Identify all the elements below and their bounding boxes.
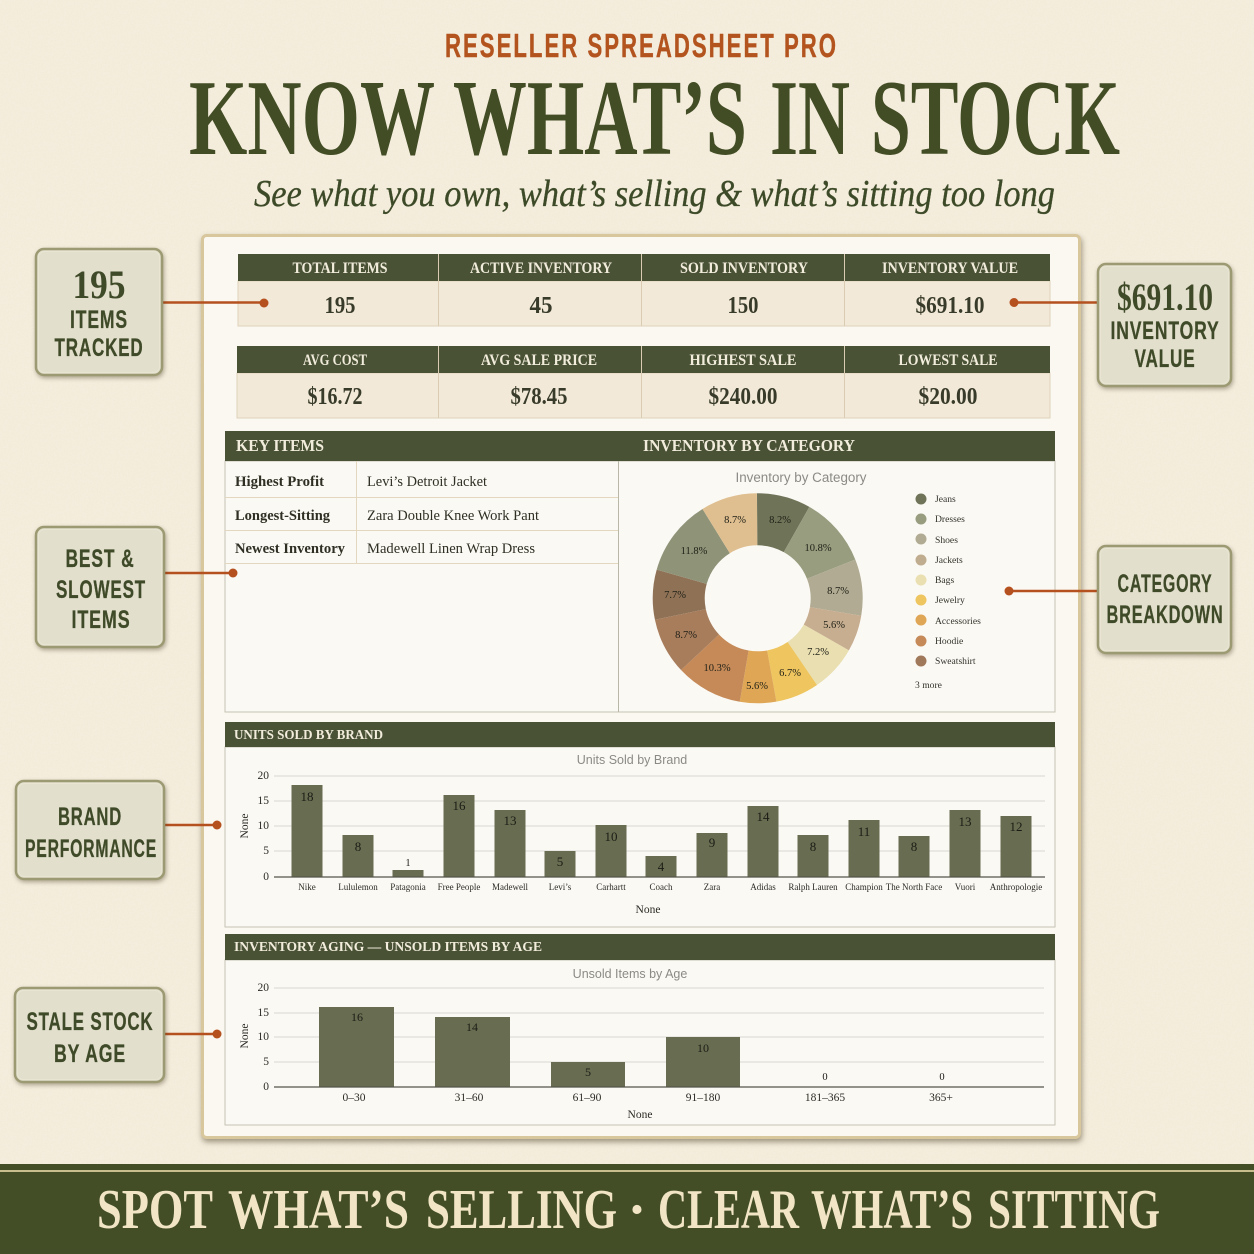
panel: spreadsheet sheet: [202, 236, 1080, 1138]
donut legend: Jeans: [935, 494, 956, 505]
donut chart: inventory by category: 8.7%: [724, 515, 746, 526]
KPI row: averages: [237, 346, 1050, 418]
KPI row: averages: LOWEST SALE: [898, 352, 998, 369]
donut legend: Shoes: [935, 535, 958, 546]
bar chart: unsold items by age: 10: [258, 1031, 269, 1043]
bar chart: units sold by brand: Nike: [298, 882, 316, 892]
key items table: [225, 461, 618, 564]
donut chart: inventory by category: 11.8%: [681, 546, 708, 557]
panel: key items and category frame: INVENTORY BY CATEGORY: [643, 436, 855, 455]
KPI row: averages: $240.00: [708, 384, 778, 410]
KPI row: averages: AVG COST: [303, 352, 368, 369]
bar chart: units sold by brand: 13: [958, 814, 972, 829]
bar chart: units sold by brand: Carhartt: [596, 882, 626, 892]
key items table: Highest Profit: [235, 474, 324, 490]
callout: best and slowest items: ITEMS: [72, 606, 130, 634]
key items table: Levi’s Detroit Jacket: [367, 474, 488, 490]
donut chart: inventory by category: 5.6%: [746, 681, 768, 692]
KPI row: averages: HIGHEST SALE: [690, 352, 796, 369]
bar chart: units sold by brand: 13: [504, 813, 516, 828]
bar chart: units sold by brand: 0: [263, 871, 269, 883]
bar chart: unsold items by age: [225, 934, 1055, 1125]
footer banner: ·: [628, 1179, 646, 1241]
bar chart: units sold by brand: Madewell: [492, 882, 528, 892]
callout: inventory value: $691.10: [1117, 276, 1213, 319]
bar chart: unsold items by age: 10: [697, 1041, 709, 1055]
KPI row: totals: ACTIVE INVENTORY: [470, 260, 612, 277]
bar chart: unsold items by age: 0–30: [342, 1092, 366, 1104]
donut legend: Sweatshirt: [935, 656, 976, 667]
bar chart: units sold by brand: Ralph Lauren: [788, 882, 838, 892]
title: KNOW: [189, 59, 435, 178]
bar chart: units sold by brand: None: [239, 814, 251, 838]
KPI row: totals: 195: [324, 293, 356, 319]
bar chart: units sold by brand: 8: [911, 839, 917, 854]
bar chart: unsold items by age: 61–90: [573, 1092, 602, 1104]
footer banner: SPOT: [97, 1179, 213, 1241]
eyebrow heading: RESELLER SPREADSHEET PRO: [445, 27, 838, 64]
bar chart: units sold by brand: None: [636, 904, 660, 916]
bar chart: unsold items by age: 0: [822, 1072, 828, 1083]
bar chart: unsold items by age: 5: [263, 1056, 269, 1068]
bar chart: units sold by brand: Anthropologie: [990, 882, 1042, 892]
KPI row: totals: TOTAL ITEMS: [292, 260, 388, 277]
donut legend: Bags: [935, 575, 954, 586]
bar chart: unsold items by age: 14: [466, 1020, 478, 1034]
bar chart: units sold by brand: Champion: [845, 882, 883, 892]
KPI row: totals: 150: [728, 293, 758, 319]
donut chart: inventory by category: [664, 470, 867, 692]
KPI row: totals: SOLD INVENTORY: [680, 260, 808, 277]
bar chart: units sold by brand: 8: [810, 839, 816, 854]
bar chart: unsold items by age: INVENTORY AGING — UNSOLD ITEMS BY AGE: [234, 940, 542, 955]
footer banner: SELLING: [426, 1179, 617, 1241]
key items table: Madewell Linen Wrap Dress: [367, 541, 535, 557]
bar chart: units sold by brand: 16: [452, 798, 466, 813]
KPI row: totals: 45: [530, 293, 552, 319]
bar chart: unsold items by age: 365+: [929, 1092, 953, 1104]
donut chart: inventory by category: 10.8%: [804, 543, 832, 554]
bar chart: unsold items by age: 20: [258, 982, 269, 994]
donut chart: inventory by category: 8.2%: [769, 515, 791, 526]
bar chart: unsold items by age: None: [239, 1024, 251, 1048]
KPI row: totals: INVENTORY VALUE: [882, 260, 1018, 277]
footer banner: SITTING: [988, 1179, 1160, 1241]
panel: key items and category frame: KEY ITEMS: [236, 436, 324, 455]
title: WHAT’S: [453, 59, 747, 178]
donut chart: inventory by category: 10.3%: [703, 663, 731, 674]
bar chart: units sold by brand: 5: [557, 854, 563, 869]
KPI row: averages: $20.00: [918, 384, 978, 410]
bar chart: units sold by brand: [225, 722, 1055, 927]
bar chart: units sold by brand: Levi’s: [549, 882, 572, 892]
callout: stale stock by age: [15, 988, 222, 1082]
bar chart: units sold by brand: Vuori: [955, 882, 976, 892]
bar chart: units sold by brand: 8: [355, 839, 361, 854]
KPI row: averages: $16.72: [308, 384, 362, 410]
key items table: Newest Inventory: [235, 541, 345, 557]
callout: brand performance: PERFORMANCE: [25, 835, 157, 863]
bar chart: units sold by brand: 12: [1010, 819, 1022, 834]
callout: brand performance: [16, 781, 222, 879]
title: IN: [770, 59, 850, 178]
callout: best and slowest items: BEST &: [66, 545, 134, 573]
donut chart: inventory by category: Inventory by Category: [736, 470, 867, 485]
callout: items tracked: ITEMS: [70, 306, 128, 334]
bar chart: units sold by brand: 5: [263, 845, 269, 857]
callout: best and slowest items: [36, 527, 238, 647]
bar chart: unsold items by age: 0: [939, 1072, 945, 1083]
bar chart: unsold items by age: 0: [263, 1081, 269, 1093]
bar chart: unsold items by age: 181–365: [805, 1092, 845, 1104]
donut chart: inventory by category: 6.7%: [779, 668, 801, 679]
bar chart: units sold by brand: Units Sold by Brand: [577, 753, 687, 767]
callout: items tracked: TRACKED: [54, 334, 144, 362]
KPI row: averages: $78.45: [510, 384, 568, 410]
KPI row: totals: [238, 254, 1050, 326]
callout: stale stock by age: BY AGE: [54, 1040, 126, 1068]
donut legend: Jackets: [935, 555, 963, 566]
bar chart: units sold by brand: 14: [756, 809, 770, 824]
key items table: Longest-Sitting: [235, 508, 330, 524]
footer banner: [0, 1164, 1254, 1254]
panel: key items and category frame: [225, 431, 1055, 712]
callout: inventory value: VALUE: [1134, 345, 1196, 373]
callout: inventory value: [1010, 264, 1231, 386]
KPI row: averages: AVG SALE PRICE: [481, 352, 597, 369]
bar chart: unsold items by age: 16: [351, 1010, 363, 1024]
callout: stale stock by age: STALE STOCK: [26, 1008, 154, 1036]
callout: best and slowest items: SLOWEST: [56, 576, 146, 604]
bar chart: unsold items by age: 5: [585, 1065, 591, 1079]
donut chart: inventory by category: 7.7%: [664, 590, 686, 601]
donut legend: [915, 494, 981, 691]
callout: category breakdown: [1004, 546, 1231, 653]
bar chart: units sold by brand: 4: [658, 859, 665, 874]
bar chart: units sold by brand: 18: [300, 789, 314, 804]
bar chart: unsold items by age: None: [628, 1109, 652, 1121]
donut chart: inventory by category: 8.7%: [675, 630, 697, 641]
bar chart: units sold by brand: 9: [709, 835, 715, 850]
donut legend: Dresses: [935, 514, 965, 525]
donut chart: inventory by category: 8.7%: [827, 586, 849, 597]
bar chart: units sold by brand: 11: [858, 824, 870, 839]
callout: items tracked: 195: [72, 262, 126, 307]
bar chart: units sold by brand: Free People: [438, 882, 480, 892]
bar chart: units sold by brand: Lululemon: [338, 882, 378, 892]
bar chart: units sold by brand: 20: [258, 770, 269, 782]
donut chart: inventory by category: 7.2%: [807, 647, 829, 658]
bar chart: units sold by brand: Patagonia: [390, 882, 426, 892]
bar chart: units sold by brand: Coach: [650, 882, 673, 892]
title: STOCK: [871, 59, 1120, 178]
callout: brand performance: BRAND: [58, 803, 122, 831]
bar chart: units sold by brand: 1: [405, 858, 411, 869]
bar chart: unsold items by age: 15: [258, 1007, 269, 1019]
bar chart: units sold by brand: 15: [258, 795, 269, 807]
footer banner: CLEAR: [658, 1179, 799, 1241]
donut legend: Jewelry: [935, 595, 965, 606]
title: [189, 59, 1120, 178]
bar chart: unsold items by age: Unsold Items by Age: [573, 967, 687, 981]
bar chart: units sold by brand: UNITS SOLD BY BRAND: [234, 728, 383, 743]
footer banner: WHAT’S: [811, 1179, 973, 1241]
KPI row: totals: $691.10: [916, 293, 984, 319]
donut chart: inventory by category: 5.6%: [823, 620, 845, 631]
subtitle: See what you own, what’s selling & what’s sitting too long: [254, 173, 1055, 215]
bar chart: unsold items by age: 91–180: [686, 1092, 720, 1104]
bar chart: units sold by brand: 10: [258, 820, 269, 832]
key items table: Zara Double Knee Work Pant: [367, 508, 540, 524]
donut legend: Accessories: [935, 616, 981, 627]
bar chart: units sold by brand: 10: [604, 829, 618, 844]
bar chart: units sold by brand: Zara: [704, 882, 720, 892]
callout: items tracked: [36, 249, 268, 375]
bar chart: unsold items by age: 31–60: [455, 1092, 484, 1104]
bar chart: units sold by brand: The North Face: [886, 882, 942, 892]
donut legend: Hoodie: [935, 636, 963, 647]
donut legend: 3 more: [915, 680, 942, 691]
footer banner: WHAT’S: [228, 1179, 409, 1241]
bar chart: units sold by brand: Adidas: [750, 882, 776, 892]
